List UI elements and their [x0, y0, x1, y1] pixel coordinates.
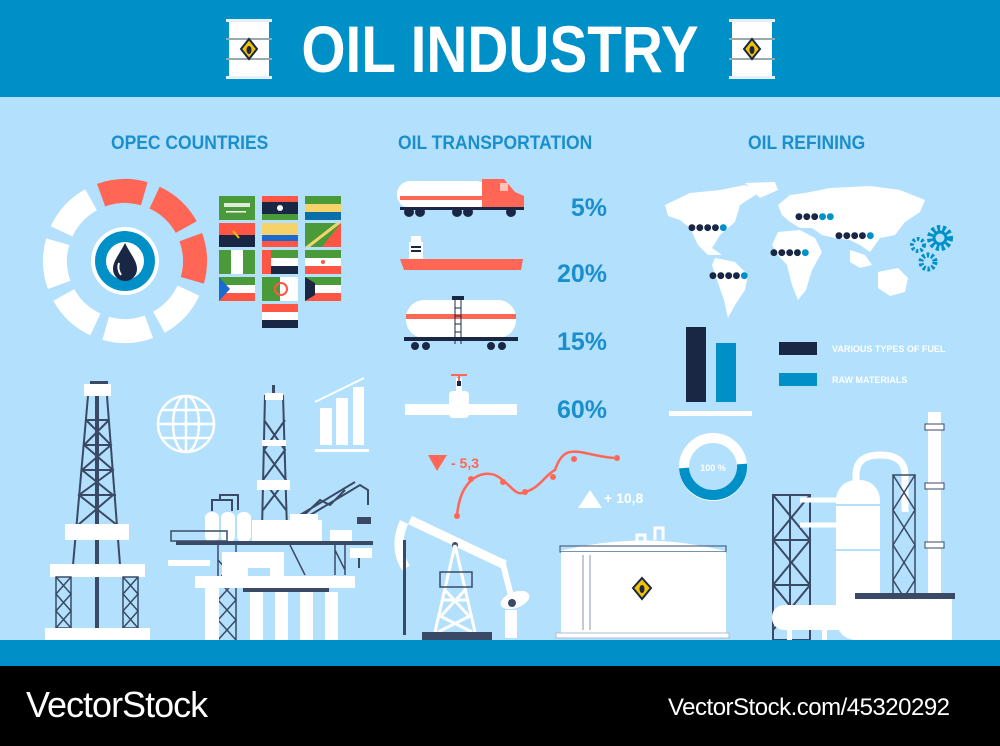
illustration: refinery [772, 412, 955, 640]
donut: 100%: 100 % [700, 463, 726, 473]
illustration: pumpjack [399, 520, 532, 640]
legend: RAW MATERIALS [832, 375, 907, 385]
oil drops on map: ●●●●● [835, 231, 874, 241]
line chart with markers: - 5,3 [451, 455, 479, 471]
flags grid [219, 196, 341, 328]
ground strip [0, 640, 1000, 666]
heading: oil transportation: OIL TRANSPORTATION [398, 133, 592, 154]
line chart with markers: + 10,8 [604, 490, 644, 506]
donut: 100% [684, 438, 742, 496]
oil drops on map: ●●●●● [709, 271, 748, 281]
world map [665, 182, 925, 318]
percentage: 15%: 15% [557, 328, 607, 356]
icon: tanker truck [397, 179, 524, 217]
icon: barrel right [729, 19, 775, 79]
percentage: 5%: 5% [571, 194, 607, 222]
illustration: storage tank [556, 528, 729, 638]
oil drops on map: ●●●●● [688, 223, 727, 233]
icon: pipeline valve [405, 374, 517, 418]
oil drops on map: ●●●●● [770, 248, 809, 258]
heading: oil refining: OIL REFINING [748, 133, 865, 154]
donut chart: opec [55, 191, 195, 331]
heading: opec countries: OPEC COUNTRIES [111, 133, 268, 154]
icon: tanker ship [400, 236, 523, 270]
percentage: 60%: 60% [557, 396, 607, 424]
header bar [0, 0, 1000, 97]
illustration: offshore platform [168, 385, 373, 640]
legend [779, 342, 946, 386]
oil drops on map [688, 212, 874, 281]
icon: growth chart [315, 378, 369, 452]
legend: VARIOUS TYPES OF FUEL [832, 344, 946, 354]
oil drops on map: ●●●●● [795, 212, 834, 222]
title: OIL INDUSTRY [301, 12, 699, 86]
icon: globe [158, 396, 214, 452]
illustration: drilling derrick [45, 381, 150, 640]
icon: gears [912, 228, 950, 269]
footer watermark bar [0, 666, 1000, 746]
bar chart: refining [669, 327, 752, 416]
watermark url: VectorStock.com/45320292 [668, 694, 950, 721]
watermark logo: VectorStock [26, 684, 207, 725]
percentage: 20%: 20% [557, 260, 607, 288]
icon: rail tank car [404, 296, 518, 350]
icon: barrel left [226, 19, 272, 79]
line chart with markers [428, 452, 644, 519]
